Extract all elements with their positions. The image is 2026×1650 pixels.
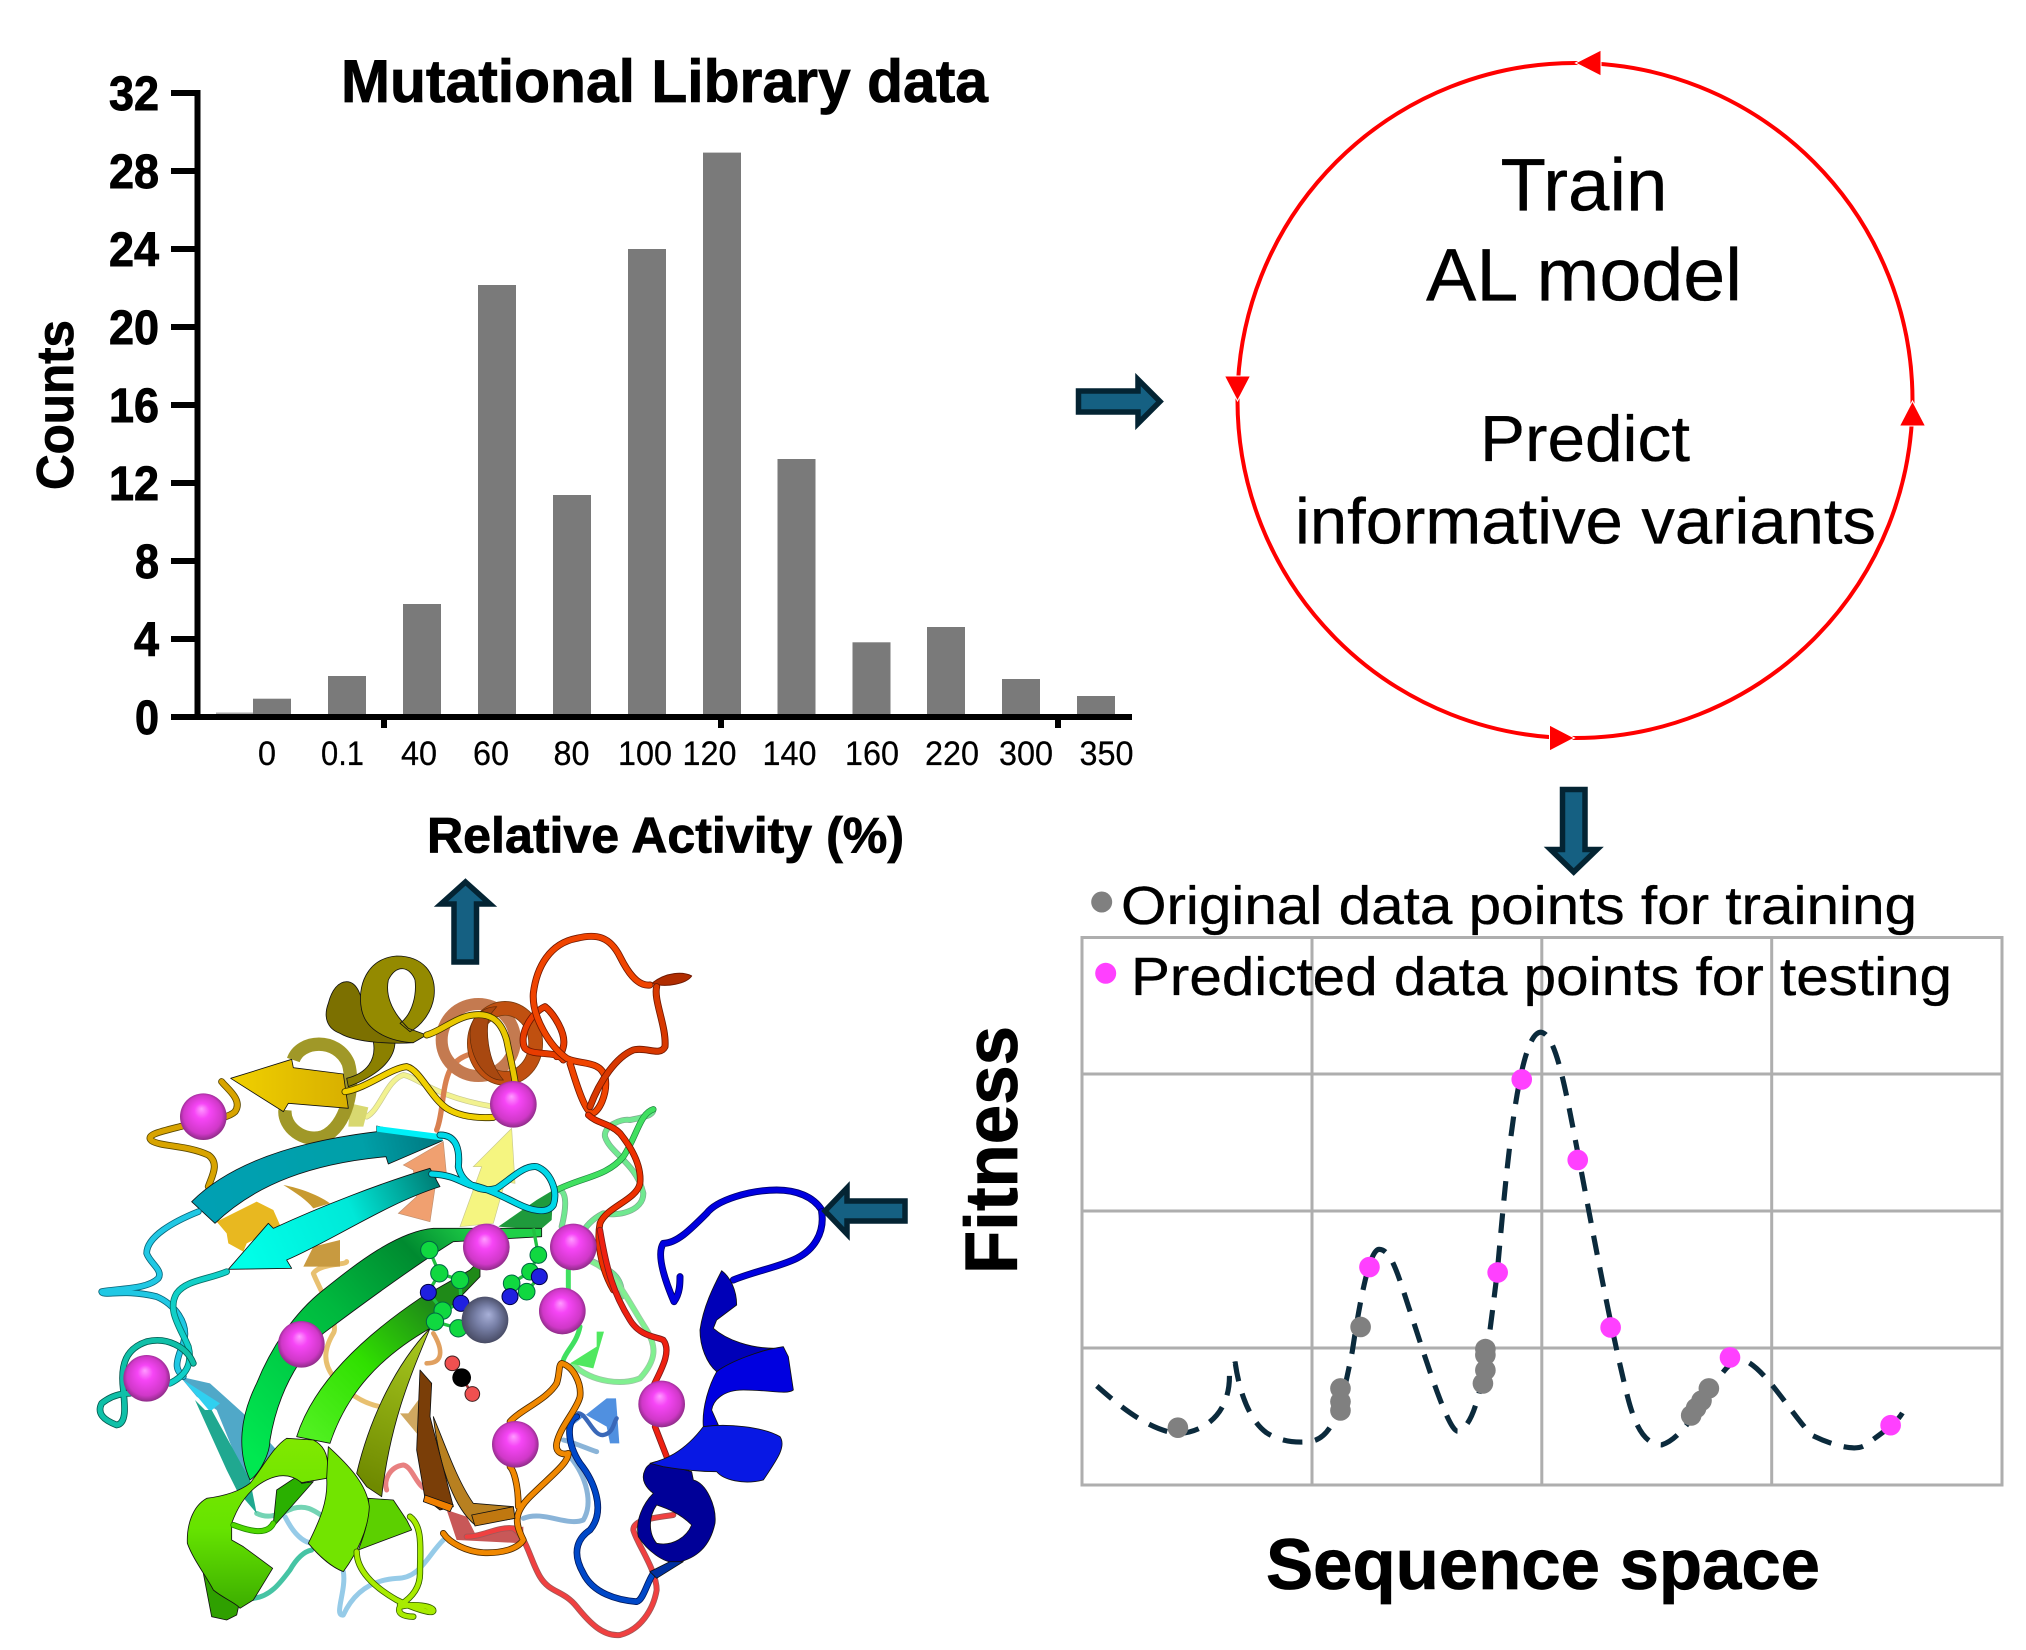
arrow: plot to protein	[825, 1188, 905, 1234]
x axis tick labels	[258, 735, 1134, 773]
magenta data points	[1359, 1069, 1901, 1436]
x axis tick labels: 60	[473, 735, 509, 773]
bars	[216, 153, 1115, 717]
x axis tick labels: 350	[1080, 735, 1134, 773]
text: predict informative variants	[1295, 402, 1876, 557]
x axis tick labels: 160	[845, 735, 899, 773]
orange strand end	[472, 1507, 515, 1526]
green loops	[557, 1109, 653, 1382]
y axis tick labels: 4	[134, 614, 159, 667]
zinc ion sphere	[462, 1297, 508, 1343]
text: train AL model: Train	[1500, 144, 1668, 227]
carbonate ligand	[445, 1356, 480, 1401]
green beta sheets	[242, 1228, 542, 1497]
gold beta strand	[231, 1059, 348, 1112]
y axis title: fitness: Fitness	[950, 1026, 1033, 1274]
plot grid	[1082, 938, 2002, 1485]
gray data points	[1168, 1317, 1719, 1438]
x axis tick labels: 80	[554, 735, 590, 773]
olive helix and gold strand	[231, 956, 434, 1112]
dashed fitness curve	[1097, 1032, 1902, 1448]
title: Mutational Library data	[341, 48, 989, 115]
lime helix	[187, 1438, 433, 1620]
y axis title: Counts	[27, 320, 85, 490]
x axis tick labels: 220	[925, 735, 979, 773]
x axis tick labels: 120	[682, 735, 736, 773]
y axis tick labels: 24	[109, 224, 159, 277]
arrow: model to fitness plot	[1550, 790, 1597, 872]
y axis tick labels: 16	[109, 380, 159, 433]
yellow and gold loops	[150, 1015, 515, 1187]
x axis tick labels: 0.1	[321, 735, 364, 773]
faded back strands and loops	[180, 1044, 523, 1615]
fitness landscape plot	[950, 876, 2002, 1605]
text: predict informative variants: informative variants	[1295, 484, 1876, 557]
bar chart: relative activity counts	[27, 68, 1134, 864]
blue loop and helix	[638, 1190, 822, 1578]
protein structure cartoon	[100, 936, 822, 1635]
green wedge behind cyan loop	[498, 1190, 553, 1230]
x axis tick labels: 300	[999, 735, 1053, 773]
legend: predicted data points: Predicted data points for testing	[1131, 947, 1952, 1007]
orange and gold lower sheets	[417, 1370, 515, 1525]
y axis tick labels	[109, 68, 159, 745]
histidine ball-and-stick ligands	[420, 1228, 547, 1337]
y axis tick labels: 32	[109, 68, 159, 121]
x axis tick labels: 40	[401, 735, 437, 773]
x axis title: Relative Activity (%)	[427, 808, 904, 864]
active learning cycle	[1224, 50, 1926, 751]
x axis title: sequence space: Sequence space	[1266, 1526, 1820, 1605]
teal and cyan beta strands	[192, 1126, 443, 1269]
text: predict informative variants: Predict	[1480, 402, 1690, 475]
arrow: chart to model	[1078, 380, 1160, 424]
red cycle circle	[1238, 63, 1912, 738]
y axis tick labels: 0	[135, 692, 159, 745]
left cyan and teal loops	[100, 1212, 227, 1425]
x axis tick labels: 0	[258, 735, 276, 773]
cycle arrowheads	[1224, 50, 1926, 751]
red strand through centre right	[588, 1115, 640, 1290]
y axis tick labels: 28	[109, 146, 159, 199]
legend: original data points: Original data points for training	[1121, 876, 1917, 936]
text: train AL model	[1426, 144, 1742, 317]
y axis tick labels: 8	[135, 536, 159, 589]
magenta mutation spheres	[123, 1081, 685, 1468]
arrow: protein to chart	[441, 882, 490, 962]
text: train AL model: AL model	[1426, 234, 1742, 317]
x axis tick labels: 140	[762, 735, 816, 773]
red-orange loop	[523, 936, 692, 1113]
axes and ticks	[171, 93, 1132, 728]
y axis tick labels: 12	[109, 458, 159, 511]
y axis tick labels: 20	[109, 302, 159, 355]
x axis tick labels: 100	[618, 735, 672, 773]
cyan loop at centre	[432, 1135, 555, 1211]
orange helix	[442, 1004, 536, 1080]
lower loops: red, orange and blue	[443, 1230, 673, 1635]
